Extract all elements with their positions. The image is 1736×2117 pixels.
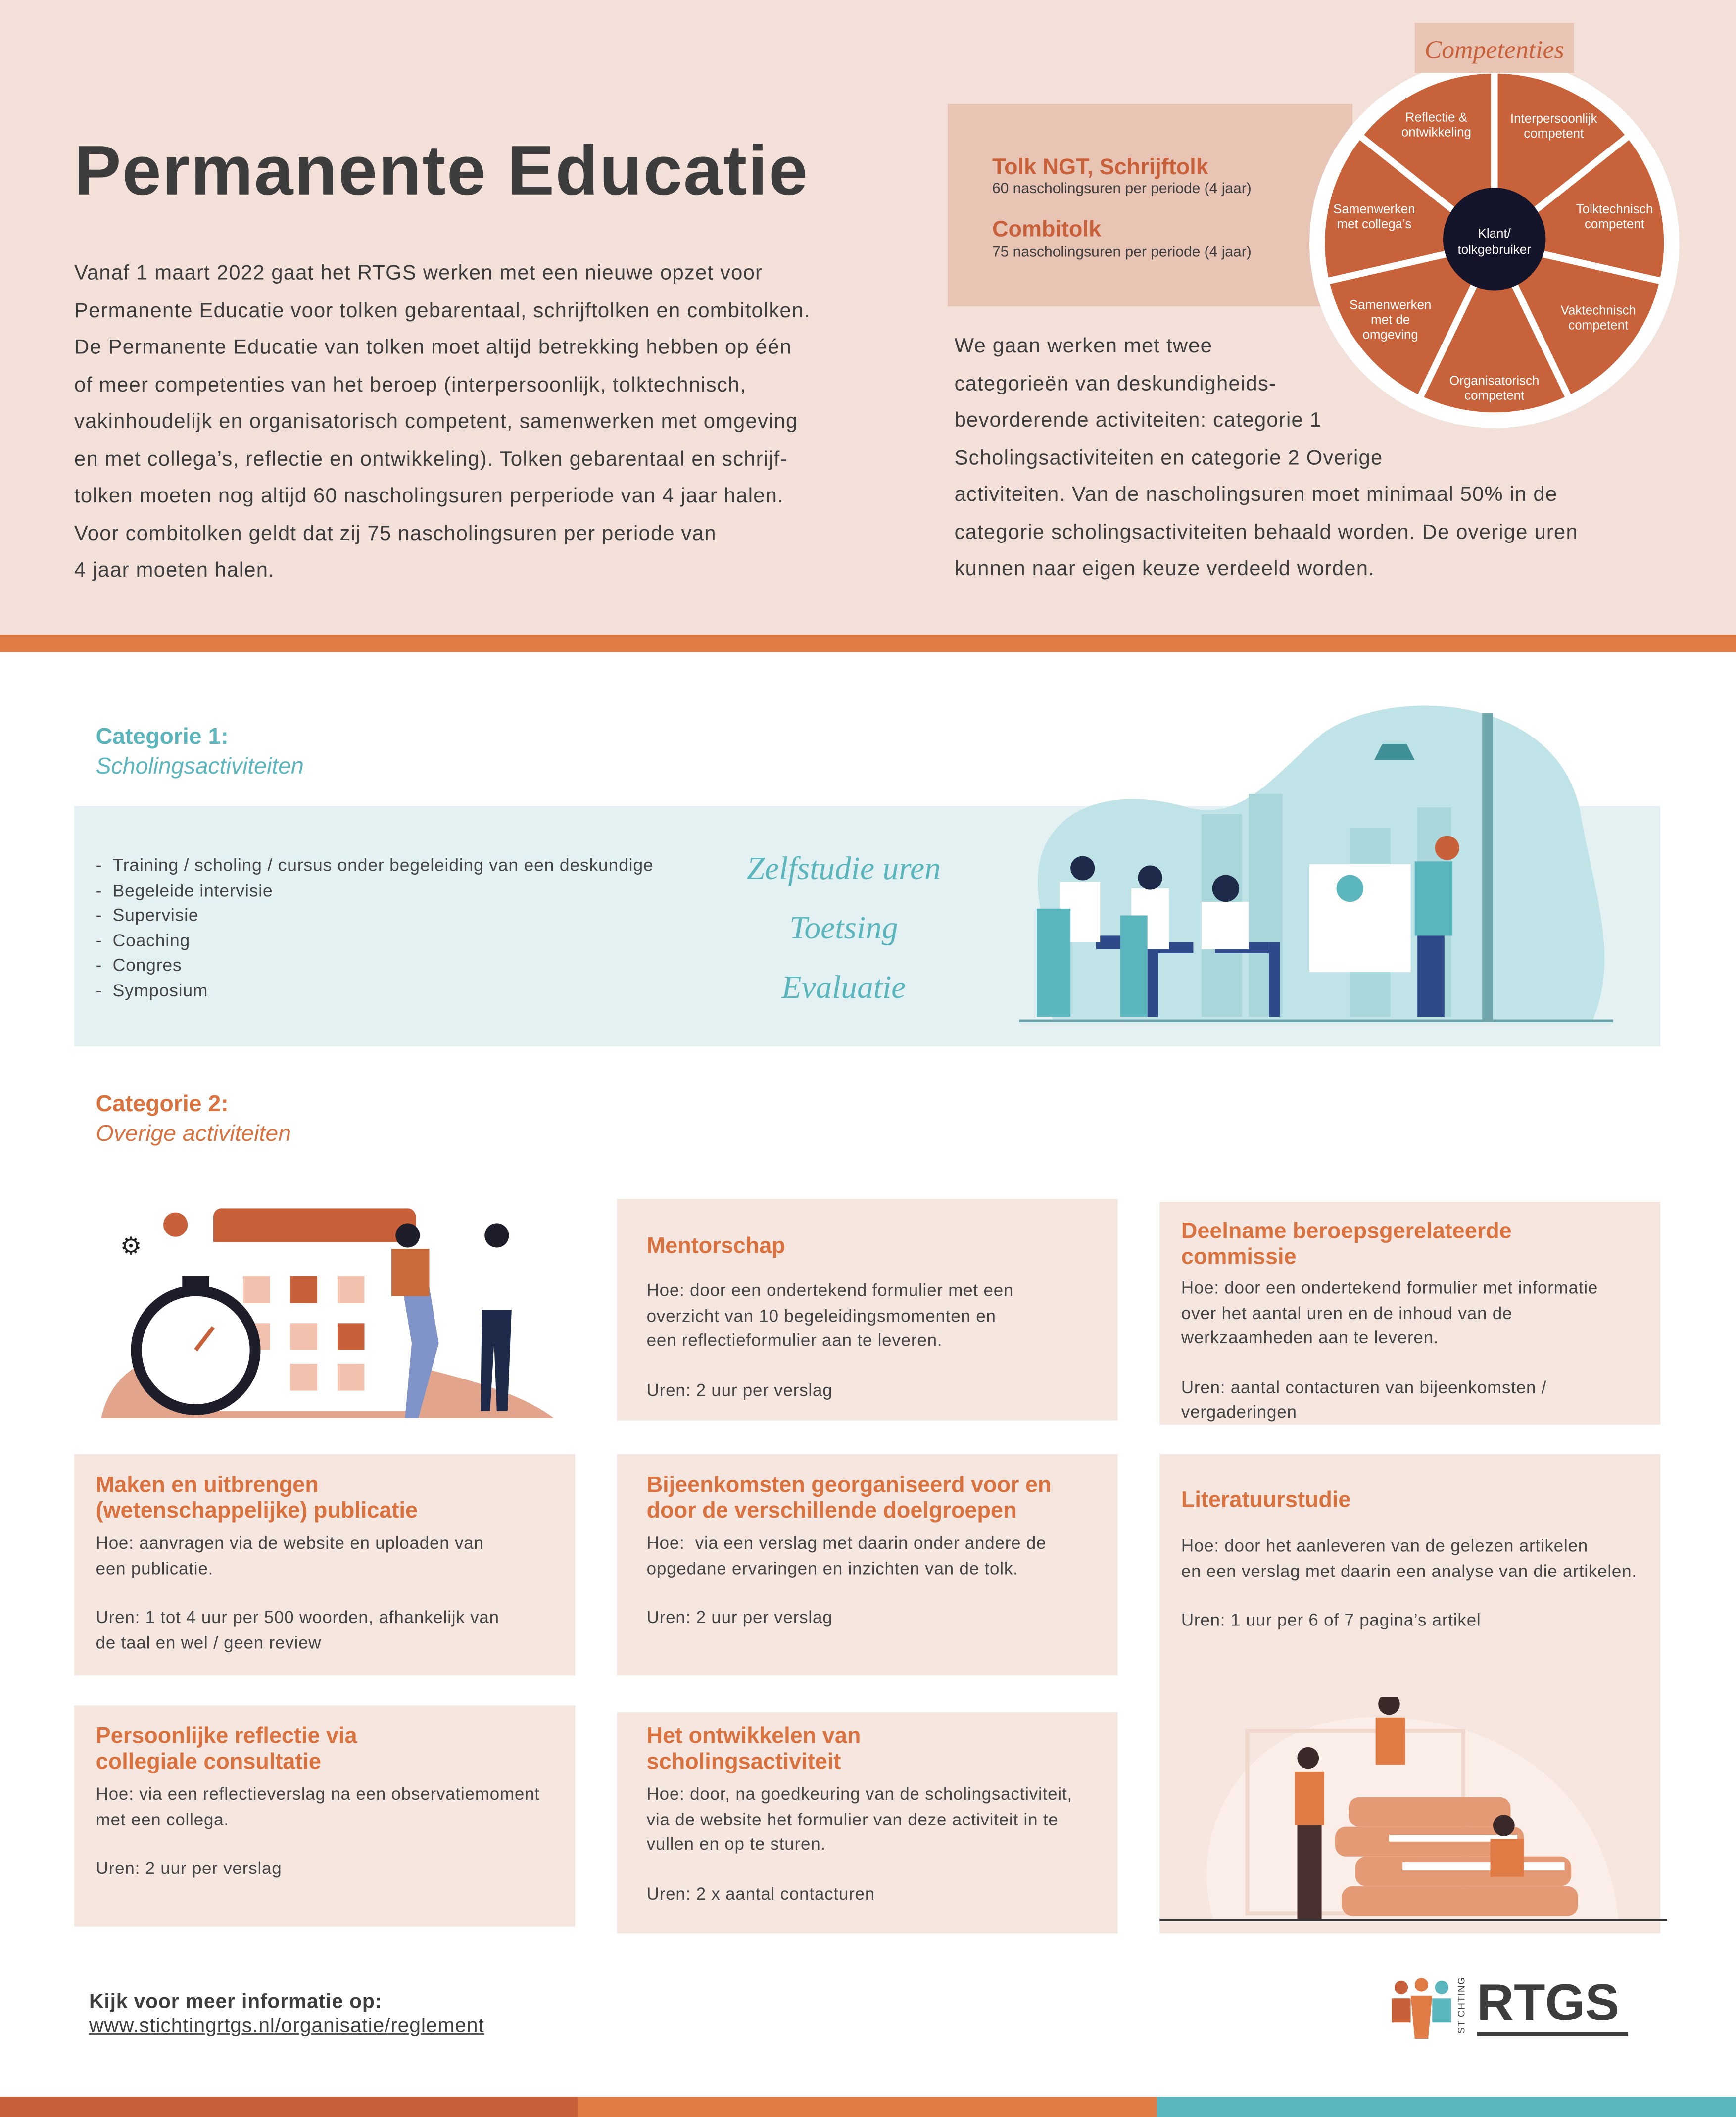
card: bijeenkomsten: Uren: 2 uur per verslag (647, 1607, 832, 1627)
competence wheel: Competenties (1425, 36, 1564, 64)
card: reflectie (74, 1705, 575, 1927)
category 1 panel: Toetsing (789, 911, 898, 946)
categories text: We gaan werken met twee (955, 335, 1212, 358)
competence wheel: tolkgebruiker (1458, 243, 1531, 257)
intro text: 4 jaar moeten halen. (74, 559, 275, 582)
intro text: De Permanente Educatie van tolken moet altijd betrekking hebben op één (74, 336, 792, 359)
competence wheel: competent (1464, 389, 1525, 402)
category 1 panel: - Coaching (96, 930, 190, 950)
intro text (74, 262, 810, 582)
category 1 panel: - Training / scholing / cursus onder begeleiding van een deskundige (96, 855, 653, 875)
intro text: of meer competenties van het beroep (interpersoonlijk, tolktechnisch, (74, 373, 746, 396)
card: Mentorschap: Hoe: door een ondertekend formulier met een (647, 1280, 1013, 1300)
header background (0, 0, 1736, 635)
illustration: calendar and stopwatch (101, 1208, 553, 1418)
logo (1392, 1975, 1628, 2039)
category 1 panel: - Begeleide intervisie (96, 880, 273, 900)
card: literatuurstudie: Uren: 1 uur per 6 of 7 pagina’s artikel (1181, 1610, 1481, 1630)
title: Permanente Educatie (74, 132, 809, 211)
card: scholingsactiviteit: scholingsactiviteit (647, 1750, 841, 1774)
card: publicatie: Uren: 1 tot 4 uur per 500 woorden, afhankelijk van (96, 1607, 499, 1627)
competence wheel: Organisatorisch (1449, 374, 1539, 388)
category 1 panel: - Symposium (96, 980, 208, 1000)
competence wheel (1309, 23, 1680, 428)
card: reflectie: Persoonlijke reflectie via (96, 1724, 357, 1749)
card: publicatie: de taal en wel / geen review (96, 1632, 321, 1652)
intro text: Permanente Educatie voor tolken gebarentaal, schrijftolken en combitolken. (74, 299, 810, 322)
category 2 heading (96, 1091, 291, 1146)
intro text: vakinhoudelijk en organisatorisch competent, samenwerken met omgeving (74, 410, 798, 434)
illustration: calendar and stopwatch: ⚙ (120, 1233, 142, 1260)
card: Mentorschap: Uren: 2 uur per verslag (647, 1379, 832, 1399)
card: bijeenkomsten: door de verschillende doelgroepen (647, 1499, 1016, 1523)
hours box: 75 nascholingsuren per periode (4 jaar) (992, 245, 1252, 260)
competence wheel: Tolktechnisch (1576, 202, 1653, 216)
card: Deelname commissie (1159, 1202, 1660, 1425)
intro text: Voor combitolken geldt dat zij 75 nascholingsuren per periode van (74, 522, 717, 545)
category 2 heading: Categorie 2: (96, 1091, 229, 1117)
card: literatuurstudie: Hoe: door het aanleveren van de gelezen artikelen (1181, 1535, 1588, 1555)
card: reflectie: met een collega. (96, 1809, 229, 1829)
footer link (89, 1990, 484, 2037)
categories text: activiteiten. Van de nascholingsuren moet minimaal 50% in de (955, 484, 1557, 506)
card: scholingsactiviteit: Uren: 2 x aantal contacturen (647, 1883, 875, 1903)
category 1 panel: Evaluatie (781, 971, 906, 1006)
competence wheel: competent (1585, 217, 1645, 231)
competence wheel: competent (1568, 319, 1629, 333)
competence wheel: omgeving (1363, 328, 1418, 342)
card: Mentorschap: Mentorschap (647, 1234, 785, 1258)
categories text: Scholingsactiviteiten en categorie 2 Overige (955, 446, 1383, 469)
footer link: Kijk voor meer informatie op: (89, 1990, 382, 2013)
card: Deelname commissie: werkzaamheden aan te leveren. (1181, 1327, 1439, 1347)
card: Deelname commissie: commissie (1181, 1245, 1297, 1269)
card: Deelname commissie: vergaderingen (1181, 1401, 1297, 1422)
competence wheel: ontwikkeling (1401, 126, 1471, 140)
intro text: tolken moeten nog altijd 60 nascholingsuren perperiode van 4 jaar halen. (74, 485, 784, 508)
hours box (948, 104, 1352, 306)
card: reflectie: Hoe: via een reflectieverslag na een observatiemoment (96, 1783, 540, 1804)
card: scholingsactiviteit (617, 1712, 1118, 1933)
card: publicatie (74, 1454, 575, 1675)
hours box: Tolk NGT, Schrijftolk (992, 155, 1208, 180)
bottom strip (0, 2097, 578, 2117)
illustration: classroom (1019, 706, 1613, 1022)
card: bijeenkomsten: Hoe: via een verslag met daarin onder andere de (647, 1532, 1046, 1553)
card: bijeenkomsten: Bijeenkomsten georganiseerd voor en (647, 1473, 1052, 1497)
category 1 panel: Zelfstudie uren (747, 852, 941, 887)
competence wheel: Klant/ (1478, 227, 1511, 241)
category 1 panel: - Congres (96, 955, 182, 975)
card: reflectie: collegiale consultatie (96, 1750, 321, 1774)
category 1 heading: Categorie 1: (96, 724, 229, 749)
illustration: books (1159, 1697, 1667, 1921)
card: scholingsactiviteit: via de website het formulier van deze activiteit in te (647, 1809, 1059, 1829)
category 2 heading: Overige activiteiten (96, 1121, 291, 1146)
logo: RTGS (1477, 1975, 1619, 2032)
card: Deelname commissie: Deelname beroepsgerelateerde (1181, 1219, 1512, 1243)
card: publicatie: een publicatie. (96, 1558, 213, 1577)
competence wheel: met de (1371, 313, 1410, 327)
competence wheel: Reflectie & (1405, 111, 1467, 125)
card: scholingsactiviteit: Hoe: door, na goedkeuring van de scholingsactiviteit, (647, 1783, 1072, 1804)
category 1 panel (74, 806, 1660, 1046)
competence wheel: Samenwerken (1333, 202, 1415, 216)
intro text: en met collega’s, reflectie en ontwikkeling). Tolken gebarentaal en schrijf- (74, 447, 788, 471)
categories text: categorieën van deskundigheids- (955, 372, 1276, 395)
card: Mentorschap: overzicht van 10 begeleidingsmomenten en (647, 1305, 996, 1325)
category 1 panel: - Supervisie (96, 905, 198, 925)
card: reflectie: Uren: 2 uur per verslag (96, 1858, 282, 1878)
card: literatuurstudie: en een verslag met daarin een analyse van die artikelen. (1181, 1560, 1637, 1580)
card: scholingsactiviteit: vullen en op te sturen. (647, 1833, 826, 1854)
categories text: kunnen naar eigen keuze verdeeld worden. (955, 558, 1375, 581)
card: Mentorschap (617, 1199, 1118, 1421)
categories text (954, 335, 1578, 581)
categories text: bevorderende activiteiten: categorie 1 (955, 409, 1322, 432)
card: Deelname commissie: Hoe: door een ondertekend formulier met informatie (1181, 1278, 1598, 1297)
category 1 heading (96, 724, 304, 779)
card: publicatie: (wetenschappelijke) publicatie (96, 1499, 418, 1523)
competence wheel: Interpersoonlijk (1510, 112, 1597, 126)
card: bijeenkomsten: opgedane ervaringen en inzichten van de tolk. (647, 1558, 1018, 1577)
card: literatuurstudie: Literatuurstudie (1181, 1488, 1351, 1512)
logo: STICHTING (1458, 1977, 1467, 2034)
hours box: Combitolk (992, 217, 1101, 242)
intro text: Vanaf 1 maart 2022 gaat het RTGS werken met een nieuwe opzet voor (74, 262, 763, 285)
card: publicatie: Hoe: aanvragen via de website en uploaden van (96, 1532, 484, 1553)
card: Mentorschap: een reflectieformulier aan te leveren. (647, 1330, 942, 1350)
card: scholingsactiviteit: Het ontwikkelen van (647, 1724, 861, 1749)
card: Deelname commissie: Uren: aantal contacturen van bijeenkomsten / (1181, 1377, 1546, 1397)
competence wheel: Vaktechnisch (1561, 304, 1636, 318)
footer link: www.stichtingrtgs.nl/organisatie/reglement (89, 2015, 484, 2037)
card: bijeenkomsten (617, 1454, 1118, 1675)
card: publicatie: Maken en uitbrengen (96, 1473, 319, 1497)
categories text: categorie scholingsactiviteiten behaald worden. De overige uren (955, 521, 1578, 543)
category 1 heading: Scholingsactiviteiten (96, 753, 304, 779)
card: literatuurstudie (1159, 1454, 1660, 1933)
competence wheel: met collega’s (1337, 217, 1411, 231)
competence wheel: Samenwerken (1350, 298, 1431, 312)
card: Deelname commissie: over het aantal uren en de inhoud van de (1181, 1302, 1512, 1323)
hours box: 60 nascholingsuren per periode (4 jaar) (992, 181, 1252, 197)
competence wheel: competent (1524, 127, 1584, 141)
